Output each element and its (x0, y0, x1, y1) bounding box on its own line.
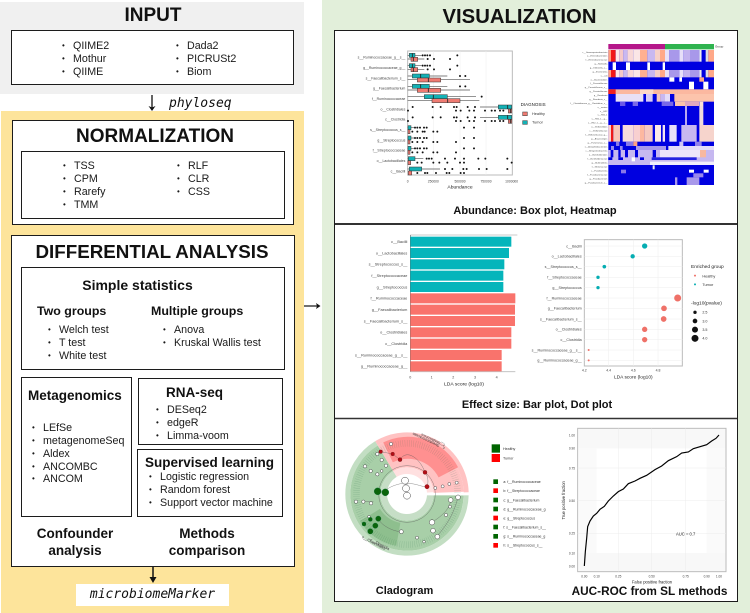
chart: abundance box plot: f__Streptococcaceae (373, 149, 405, 153)
legend: cladogram groups and taxa: Tumor (503, 456, 514, 460)
dark red nodes (379, 450, 429, 489)
chart: cladogram: c__Streptococcaceae (412, 432, 445, 450)
differential analysis box (11, 235, 295, 567)
supervised learning box (137, 449, 283, 517)
list: input tools left: QIIME (73, 66, 103, 78)
chart: ROC curve: 0.90 (569, 447, 575, 451)
chart: cladogram: o__Clostridiales (361, 535, 386, 551)
chart: LDA dot plot: o__Lactobacillales (552, 255, 582, 259)
chart: ROC curve: AUC = 0.7 (676, 531, 696, 536)
green sectors (348, 435, 466, 553)
chart: LDA bar plot: g__Ruminococcaceae_g__ (361, 365, 408, 369)
chart: ROC curve: 0.10 (594, 574, 600, 578)
chart: LDA bar plot (355, 235, 517, 388)
normalization box (12, 120, 294, 225)
list: input tools right (176, 40, 236, 78)
chart: LDA bar plot: LDA score (log10) (444, 382, 484, 388)
list: metagenomics methods: Aldex (43, 448, 70, 460)
panel: visualization (322, 0, 750, 613)
chart: LDA dot plot: s__Streptococcus_s__ (545, 265, 583, 269)
caption: cladogram: Cladogram (376, 585, 433, 597)
list: two groups tests: Welch test (59, 324, 109, 336)
legend: enriched group and p-value: Tumor (702, 283, 714, 287)
list: input tools right: Biom (187, 66, 211, 78)
chart: LDA dot plot: s__Ruminococcaceae_g__s__ (532, 348, 583, 352)
chart: abundance box plot: 750000 (480, 179, 492, 183)
chart: heatmap: f__Prevotellaceae (590, 82, 608, 85)
chart: LDA dot plot: s__Faecalibacterium_s__ (540, 317, 583, 321)
chart: heatmap: c__Veillonellaceae (589, 131, 608, 133)
list: metagenomics methods: LEfSe (43, 422, 72, 434)
input tools box (11, 30, 294, 85)
subheading: two groups: Two groups (37, 304, 106, 318)
chart: LDA bar plot: 0 (409, 376, 411, 380)
chart: LDA bar plot: f__Streptococcaceae (371, 274, 407, 278)
metagenomics box (21, 377, 132, 517)
list: normalization right: CLR (188, 173, 209, 185)
chart: heatmap: g__Escherichia (593, 70, 608, 73)
label: phyloseq: phyloseq (169, 96, 232, 111)
chart: heatmap: f__Veillonellaceae_g__ (585, 135, 608, 137)
chart: LDA bar plot: s__Streptococcus_s__ (369, 263, 408, 267)
list: normalization left: TSS (74, 160, 95, 172)
chart: LDA dot plot: c__Bacilli (566, 244, 582, 248)
chart: heatmap: f__Vibrionaceae (591, 165, 608, 168)
chart: heatmap: g__Fusobacterium_s__ (585, 181, 608, 184)
list: normalization left: Rarefy (74, 186, 105, 198)
simple statistics box (21, 267, 285, 370)
list: metagenomics methods: metagenomeSeq (43, 435, 124, 447)
list: normalization left: CPM (74, 173, 98, 185)
teal boxes (408, 53, 512, 171)
chart: LDA dot plot: 4.4 (606, 369, 611, 373)
chart: LDA dot plot: g__Ruminococcaceae_g__ (537, 359, 583, 363)
chart: heatmap: g__Parvimonas_s__ (588, 142, 608, 145)
legend: cladogram groups and taxa: c: g__Faecalibacterium (503, 498, 539, 502)
visualization charts frame (334, 30, 738, 602)
list: supervised learning methods: Logistic regression (160, 471, 249, 483)
chart: heatmap: g__Roseburia_s__ (589, 98, 608, 101)
chart: LDA dot plot: o__Clostridiales (556, 328, 582, 332)
chart: ROC curve: 0.75 (683, 574, 689, 578)
list: metagenomics methods (32, 422, 124, 485)
list: RNA-seq methods (156, 404, 229, 442)
label: microbiomeMarker (76, 584, 229, 606)
chart: LDA bar plot: c__Clostridia (385, 342, 408, 346)
caption: AUC-ROC: AUC-ROC from SL methods (572, 584, 728, 598)
legend: diagnosis (521, 102, 546, 125)
list: multiple groups tests: Kruskal Wallis test (174, 337, 261, 349)
legend: enriched group and p-value (691, 264, 724, 342)
legend: cladogram groups and taxa: f: s__Faecalibacterium_s__ (503, 525, 546, 529)
chart: heatmap: c__Gammaproteobacteria (582, 51, 608, 54)
chart: heatmap: g__Roseburia (594, 94, 608, 97)
list: input tools right: Dada2 (187, 40, 218, 52)
chart: LDA bar plot: s__Faecalibacterium_s__ (364, 319, 408, 323)
heading: confounder analysis: Confounder (37, 526, 113, 541)
outliers (408, 55, 512, 173)
pink band (608, 125, 714, 142)
chart: ROC curve: 0.00 (569, 564, 575, 568)
red sectors (377, 435, 466, 492)
legend: cladogram groups and taxa: e: g__Streptococcus (503, 516, 535, 520)
list: input tools right: PICRUSt2 (187, 53, 236, 65)
chart: ROC curve: 1.00 (569, 433, 575, 437)
heading: confounder analysis: analysis (48, 543, 102, 558)
chart: heatmap: c__Betaproteobacteria (586, 150, 608, 153)
chart: ROC curve: 1.00 (716, 574, 722, 578)
chart: heatmap: o__Veillonellales (591, 127, 607, 129)
list: RNA-seq methods: Limma-voom (167, 430, 229, 442)
chart: LDA dot plot: g__Streptococcus (552, 286, 582, 290)
heading: methods comparison: comparison (169, 543, 245, 558)
medians (412, 53, 510, 123)
chart: abundance box plot: f__Ruminococcaceae (372, 97, 405, 101)
heading: normalization: NORMALIZATION (76, 126, 234, 147)
legend: cladogram groups and taxa: g: s__Ruminococcaceae_g (503, 535, 545, 539)
chart: heatmap: s__H32_1__g__s__ (588, 123, 608, 125)
legend: enriched group and p-value: Enriched group (691, 264, 724, 270)
chart: heatmap: s__Aerophilobacterales (585, 146, 607, 149)
divider: third row (335, 418, 737, 420)
legend: enriched group and p-value: 4.0 (702, 337, 707, 341)
label: microbiomeMarker: microbiomeMarker (90, 587, 215, 602)
chart: abundance box plot: 0 (407, 179, 409, 183)
chart: heatmap: g__Prevotellaceae (589, 90, 608, 93)
chart: abundance box plot: 250000 (428, 179, 439, 183)
chart: abundance box plot: o__Lactobacillales (377, 159, 406, 163)
heading: confounder analysis (37, 526, 114, 558)
chart: abundance box plot: g__Faecalibacterium (373, 87, 405, 91)
heading: supervised learning: Supervised learning (145, 455, 274, 470)
chart: heatmap: f__Burkholderiaceae (587, 158, 608, 161)
chart: heatmap: g__Burkholderia (592, 162, 608, 165)
chart: heatmap: s__H32 (600, 111, 608, 113)
legend: enriched group and p-value: Healthy (702, 274, 715, 278)
tree hatching (356, 443, 458, 545)
list: normalization right: RLF (188, 160, 208, 172)
chart: LDA bar plot: c__Bacilli (391, 240, 407, 244)
subheading: multiple groups: Multiple groups (151, 304, 243, 318)
list: normalization left (63, 160, 106, 211)
arrow: to visualization (304, 303, 320, 309)
heading: RNA-seq: RNA-seq (166, 385, 223, 400)
list: normalization left: TMM (74, 199, 98, 211)
chart: LDA bar plot: g__Streptococcus (377, 285, 407, 289)
legend: cladogram groups and taxa: h: s__Streptococcus_s__ (503, 544, 543, 548)
legend: enriched group and p-value: 3.5 (702, 328, 707, 332)
list: supervised learning methods: Support vector machine (160, 497, 273, 509)
legend: diagnosis: DIAGNOSIS (521, 102, 546, 107)
chart: ROC curve: 0.25 (569, 532, 575, 536)
list: multiple groups tests (163, 324, 261, 349)
chart: LDA bar plot: 1 (431, 376, 433, 380)
chart: heatmap: s__H32_1__g__ (592, 119, 608, 121)
caption: abundance: Abundance: Box plot, Heatmap (453, 205, 617, 217)
chart: heatmap: g__Prevotellaceae_s__ (585, 86, 608, 89)
chart: LDA bar plot: g__Faecalibacterium (372, 308, 407, 312)
chart: LDA dot plot: 4.2 (582, 369, 587, 373)
chart: LDA dot plot: LDA score (log10) (614, 374, 653, 380)
chart: heatmap: g__Fusobacterium (589, 177, 608, 180)
chart: heatmap: s__H32_1 (597, 115, 608, 117)
legend: cladogram groups and taxa: Healthy (503, 447, 516, 451)
legend: cladogram groups and taxa: d: g__Ruminococcaceae_g (503, 507, 546, 511)
heading: metagenomics: Metagenomics (28, 388, 122, 403)
chart: heatmap: s__coli (601, 75, 608, 77)
chart: cladogram: f__Streptococcus (420, 432, 445, 447)
chart: abundance box plot: s__Streptococcus_s__ (370, 128, 405, 132)
arrow: to microbiomeMarker (150, 567, 156, 583)
heading: methods comparison (169, 526, 245, 558)
RNA-seq box (138, 378, 283, 445)
list: RNA-seq methods: DESeq2 (167, 404, 207, 416)
chart: LDA bar plot: s__Ruminococcaceae_g__s__ (355, 353, 408, 357)
chart: heatmap: g__Anaerostipes (591, 138, 607, 141)
list: two groups tests (48, 324, 109, 362)
panel: input (0, 2, 304, 94)
chart: LDA dot plot: g__Faecalibacterium (548, 307, 582, 311)
chart: abundance box plot: c__Bacilli (391, 169, 406, 173)
chart: LDA bar plot: f__Ruminococcaceae (371, 297, 407, 301)
dark green nodes (362, 488, 389, 534)
normalization methods box (21, 151, 285, 219)
chart: abundance box plot: Abundance (447, 185, 473, 191)
panel: yellow analysis section (1, 111, 304, 613)
chart: LDA bar plot: 4 (496, 376, 498, 380)
list: two groups tests: White test (59, 350, 107, 362)
chart: ROC curve: 0.10 (569, 551, 575, 555)
pale row (616, 94, 643, 102)
list: metagenomics methods: ANCOM (43, 473, 83, 485)
heading: visualization: VISUALIZATION (442, 6, 596, 28)
chart: ROC curve: 0.75 (569, 466, 575, 470)
salmon row (608, 89, 714, 94)
whiskers (408, 55, 512, 169)
chart: ROC curve (561, 428, 726, 584)
heading: input: INPUT (124, 5, 182, 26)
legend: diagnosis: Tumor (532, 121, 544, 125)
list: metagenomics methods: ANCOMBC (43, 461, 98, 473)
chart: LDA dot plot (532, 240, 682, 380)
red boxes (408, 57, 512, 175)
chart: LDA bar plot: o__Clostridiales (380, 331, 407, 335)
chart: ROC curve: 0.50 (569, 499, 575, 503)
legend: enriched group and p-value: 2.5 (702, 311, 707, 315)
list: RNA-seq methods: edgeR (167, 417, 198, 429)
chart: heatmap: f__Clostridiaceae_g__Clostridium_s__ (570, 102, 608, 105)
heading: methods comparison: Methods (179, 526, 235, 541)
list: normalization right: CSS (188, 186, 210, 198)
chart: abundance box plot: c__Clostridia (385, 118, 405, 122)
list: two groups tests: T test (59, 337, 86, 349)
white nodes (354, 442, 460, 543)
divider: first row (335, 223, 737, 224)
heading: simple statistics: Simple statistics (82, 277, 193, 293)
chart: ROC curve: 0.90 (704, 574, 710, 578)
chart: cladogram (348, 432, 470, 553)
caption: effect size: Effect size: Bar plot, Dot plot (462, 399, 613, 411)
list: input tools left: Mothur (73, 53, 106, 65)
chart: LDA dot plot: f__Ruminococcaceae (546, 296, 582, 300)
chart: ROC curve: True positive fraction (561, 480, 566, 520)
chart: LDA bar plot: 3 (474, 376, 476, 380)
legend: enriched group and p-value: -log10(pvalue) (691, 300, 722, 306)
chart: heatmap: f__Fusobacteriaceae (587, 173, 608, 176)
legend: cladogram groups and taxa: a: f__Ruminococcaceae (503, 480, 541, 484)
chart: heatmap: c__Fusobacteriia (591, 169, 608, 172)
chart: abundance box plot: s__Faecalibacterium_s__ (366, 76, 405, 80)
list: multiple groups tests: Anova (174, 324, 204, 336)
chart: LDA bar plot: 2 (452, 376, 454, 380)
chart: abundance box plot: 500000 (454, 179, 466, 183)
legend: enriched group and p-value: 3.0 (702, 319, 707, 323)
chart: ROC curve: 0.00 (581, 574, 588, 578)
legend: cladogram groups and taxa: b: f__Streptococcaceae (503, 489, 540, 493)
chart: ROC curve: 0.50 (649, 574, 655, 578)
chart: heatmap: Group (715, 45, 724, 49)
list: supervised learning methods (149, 471, 273, 509)
heading: differential analysis: DIFFERENTIAL ANALYSIS (35, 241, 269, 262)
chart: abundance box plot: 1000000 (505, 179, 518, 183)
list: normalization right (177, 160, 210, 198)
chart: heatmap: o__Enterobacteriales (587, 55, 607, 58)
chart: abundance box plot: s__Ruminococcaceae_g__s__ (358, 56, 405, 60)
chart: LDA bar plot: o__Lactobacillales (376, 251, 407, 255)
chart: heatmap: s__ovatus (597, 106, 607, 109)
legend: cladogram groups and taxa (492, 444, 546, 548)
arrow: input to normalization (148, 95, 156, 111)
legend: diagnosis: Healthy (532, 112, 545, 116)
chart: abundance box plot: g__Ruminococcaceae_g__ (363, 66, 405, 70)
chart: LDA dot plot: c__Clostridia (561, 338, 583, 342)
chart: abundance box plot (358, 51, 518, 191)
chart: abundance box plot: o__Clostridiales (381, 107, 406, 111)
chart: LDA dot plot: f__Streptococcaceae (547, 276, 582, 280)
chart: heatmap: o__Burkholderiales (589, 154, 607, 157)
chart: cladogram: c__Clostridia (370, 538, 391, 552)
chart: heatmap: g__Klebsiella_s__ (590, 67, 608, 69)
list: supervised learning methods: Random forest (160, 484, 230, 496)
chart: abundance box plot: g__Streptococcus (377, 138, 406, 142)
list: input tools left: QIIME2 (73, 40, 109, 52)
chart: heatmap: f__Enterobacteriaceae (585, 58, 608, 61)
chart: heatmap (570, 44, 724, 185)
chart: heatmap: o__Bacteroidales (591, 78, 607, 81)
chart: ROC curve: 0.25 (615, 574, 622, 578)
chart: heatmap: g__Klebsiella (595, 63, 608, 65)
chart: LDA dot plot: 4.6 (631, 369, 636, 373)
arrow and label: phyloseq (148, 95, 232, 111)
chart: ROC curve: False positive fraction (632, 579, 673, 584)
list: input tools left (62, 40, 109, 78)
chart: LDA dot plot: 4.8 (656, 369, 660, 373)
